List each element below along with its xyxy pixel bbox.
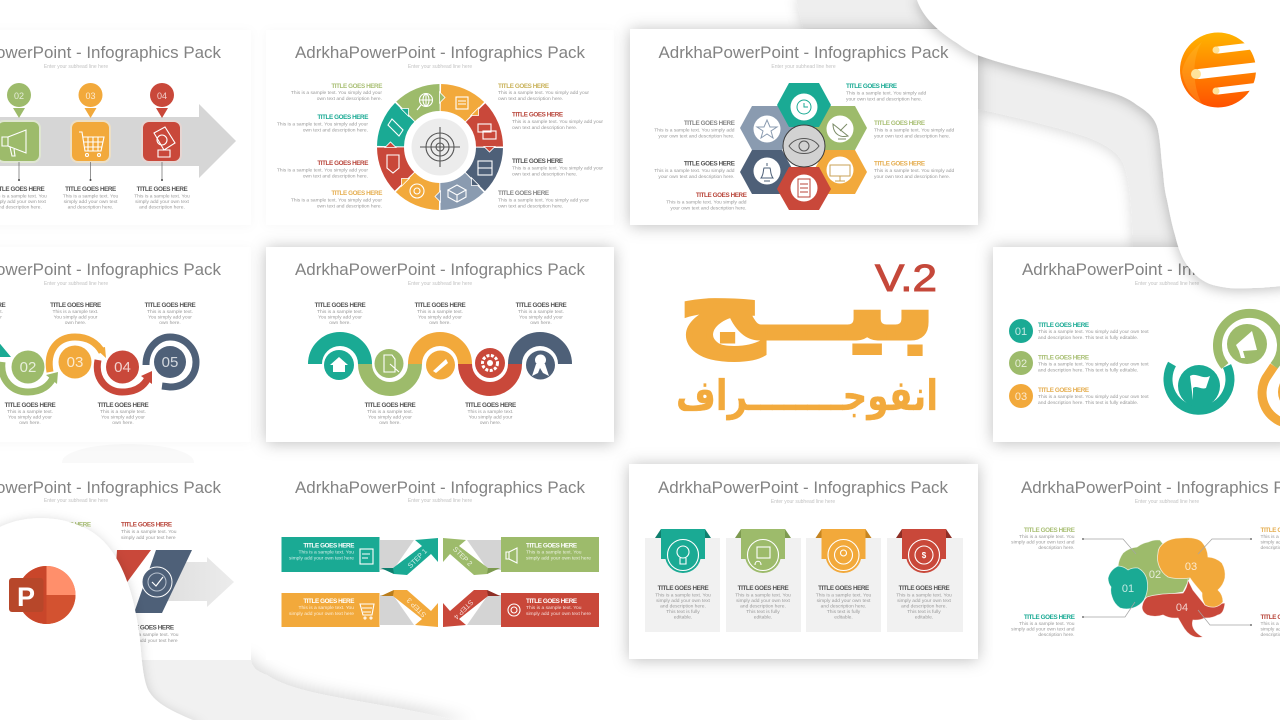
panel: center logo xyxy=(630,247,978,442)
slide 5 labels: own here. xyxy=(429,320,451,326)
brain labels: simply add your own text and xyxy=(1011,626,1075,632)
hexagon cluster xyxy=(740,83,867,210)
brain labels xyxy=(1011,527,1280,638)
wheel labels right: This is a sample text. You simply add your xyxy=(498,198,589,204)
hexagon labels left: TITLE GOES HERE xyxy=(684,160,735,168)
step 04: and description here. xyxy=(139,204,185,210)
panel: slide 9 cards xyxy=(629,464,978,659)
panel: slide 1 arrow timeline xyxy=(0,30,251,225)
slide 5 labels: TITLE GOES HERE xyxy=(315,302,366,309)
card 3: editable. xyxy=(834,614,853,620)
slide 4 labels: This is a sample text. xyxy=(100,409,146,415)
top-right white swoosh xyxy=(917,0,1280,289)
slide 4 labels: You simply add your xyxy=(54,314,98,320)
steps row one: TITLE GOES HERE xyxy=(303,542,354,550)
brain labels: description here. xyxy=(1038,632,1074,638)
slide 7 labels xyxy=(40,522,179,644)
slide 4 labels: You simply add your xyxy=(148,314,192,320)
brain chart xyxy=(1108,538,1225,638)
card 3: This text is fully xyxy=(827,609,861,615)
step 02 xyxy=(0,83,47,210)
slide 4 labels: This is a sample text. xyxy=(53,309,98,315)
card 3: and description here. xyxy=(821,604,866,610)
steps row two: simply add your own text here xyxy=(289,611,354,617)
card 3: This is a sample text. You xyxy=(816,592,872,598)
step 04: 04 xyxy=(157,91,167,101)
steps row two: This is a sample text. You xyxy=(299,605,354,611)
brain labels: TITLE GOES HERE xyxy=(1024,614,1075,621)
hexagon labels left: This is a sample text. You simply add xyxy=(654,128,735,134)
slide 5 labels xyxy=(315,302,567,426)
hexagon labels left: This is a sample text. You simply add xyxy=(654,168,735,174)
steps row one: simply add your own text here xyxy=(526,556,591,562)
steps row two: TITLE GOES HERE xyxy=(303,598,354,605)
numbered list: TITLE GOES HERE xyxy=(1038,387,1089,394)
slide 5 labels: TITLE GOES HERE xyxy=(516,302,567,309)
panel: slide 6 linked rings xyxy=(993,247,1280,442)
slide 7 labels: TITLE GOES HERE xyxy=(121,522,172,528)
card 4: TITLE GOES HERE xyxy=(899,585,950,592)
hexagon labels left: your own text and description here. xyxy=(658,174,734,180)
arrows and numbers: 04 xyxy=(114,359,131,376)
Arabic title: بيــج xyxy=(679,256,935,359)
step 03: TITLE GOES HERE xyxy=(65,186,116,193)
ring diagram xyxy=(1168,313,1280,424)
brain labels: This is a sample text. You xyxy=(1019,534,1075,540)
brain numbers xyxy=(1122,561,1197,614)
brain labels: TITLE GOES HERE xyxy=(1024,527,1075,534)
step 04 xyxy=(134,83,190,210)
slide 5 labels: You simply add your xyxy=(519,314,563,320)
brain labels: simply add your own text and xyxy=(1011,540,1075,546)
slide 4 labels: This is a sample text. xyxy=(147,309,193,315)
panel: slide 8 steps xyxy=(266,463,614,660)
wheel labels left: own text and description here. xyxy=(317,96,382,102)
slide 1 subhead: Enter your subhead line here xyxy=(44,64,108,70)
wheel labels right: TITLE GOES HERE xyxy=(512,112,563,118)
hexagon labels left: TITLE GOES HERE xyxy=(696,192,747,199)
step 03: This is a sample text. You xyxy=(63,194,119,200)
slide 7 labels: simply add your text here xyxy=(123,638,178,644)
slide 2 subhead: Enter your subhead line here xyxy=(408,64,472,70)
step 04: TITLE GOES HERE xyxy=(137,186,188,193)
slide 5 subhead: Enter your subhead line here xyxy=(408,281,472,287)
card 1: editable. xyxy=(674,614,692,620)
card 2: editable. xyxy=(754,614,772,620)
wheel labels left: This is a sample text. You simply add your xyxy=(277,168,368,174)
Arabic subtitle: انفوجــــــــراف xyxy=(676,371,938,421)
gray arrow xyxy=(0,104,236,178)
slide 5 labels: You simply add your xyxy=(368,414,412,420)
wheel labels left: own text and description here. xyxy=(317,204,382,210)
brain labels: This is a sample text. You xyxy=(1019,621,1075,627)
numbered list: 02 xyxy=(1015,358,1027,370)
hexagon labels right: your own text and description here. xyxy=(874,134,950,140)
step 03 xyxy=(63,83,119,210)
card 2 xyxy=(726,529,801,632)
slide 4 labels: TITLE GOES HERE xyxy=(50,302,101,309)
wheel labels left: TITLE GOES HERE xyxy=(317,160,368,167)
wheel labels right: TITLE GOES HERE xyxy=(498,83,549,90)
step 04: This is a sample text. You xyxy=(134,194,190,200)
steps row two: STEP 4 xyxy=(452,598,474,620)
brain leader lines xyxy=(1082,538,1252,626)
slide 5 labels: This is a sample text. xyxy=(518,309,564,315)
arrows and numbers: 02 xyxy=(20,359,36,376)
hexagon labels left: your own text and description here. xyxy=(670,206,746,212)
slide 5 labels: TITLE GOES HERE xyxy=(365,402,416,409)
slide 5 labels: own here. xyxy=(480,420,501,426)
hexagon labels right: This is a sample text. You simply add xyxy=(846,90,926,96)
card 1: This text is fully xyxy=(666,609,700,615)
slide 4 labels: You simply add your xyxy=(101,414,145,420)
wheel labels left: own text and description here. xyxy=(303,174,368,180)
wheel labels left: This is a sample text. You simply add your xyxy=(277,122,368,128)
steps row one: TITLE GOES HERE xyxy=(526,542,577,550)
card 4: simply add your own text xyxy=(897,598,952,604)
brain numbers: 01 xyxy=(1122,583,1134,595)
panel: slide 2 segmented wheel xyxy=(266,30,614,225)
bottom-left white lobe xyxy=(0,518,205,720)
card 2: and description here. xyxy=(740,604,786,610)
slide 5 labels: This is a sample text. xyxy=(367,409,413,415)
wheel labels right: own text and description here. xyxy=(498,204,563,210)
numbered list: TITLE GOES HERE xyxy=(1038,322,1089,329)
arrows and numbers xyxy=(0,337,196,392)
brain numbers: 04 xyxy=(1176,602,1188,614)
wheel chart xyxy=(370,77,510,217)
slide 7 labels: TITLE GOES HERE xyxy=(40,522,91,528)
panel: slide 3 hexagons xyxy=(630,29,978,225)
slide 7 labels: simply add your text here xyxy=(121,535,176,541)
slide 3 heading: AdrkhaPowerPoint - Infographics Pack xyxy=(658,43,949,62)
wheel labels right: TITLE GOES HERE xyxy=(498,190,549,197)
slide 4 labels: own here. xyxy=(65,320,86,326)
wheel labels right xyxy=(498,83,603,210)
wheel labels left: This is a sample text. You simply add your xyxy=(291,198,382,204)
arrows and numbers: 03 xyxy=(67,354,83,371)
slide 2 heading: AdrkhaPowerPoint - Infographics Pack xyxy=(295,43,585,62)
card 4: This text is fully xyxy=(907,609,941,615)
slide 5 labels: TITLE GOES HERE xyxy=(415,302,466,309)
slide 4 subhead: Enter your subhead line here xyxy=(44,281,108,287)
steps row two: This is a sample text. You xyxy=(526,605,582,611)
hexagon labels left: your own text and description here. xyxy=(658,134,734,140)
panel: slide 7 diagonal ribbons xyxy=(0,463,251,660)
wave graphic xyxy=(315,339,565,389)
steps row one: This is a sample text. You xyxy=(526,550,582,556)
wheel labels left: This is a sample text. You simply add your xyxy=(291,90,382,96)
card 1: This is a sample text. You xyxy=(655,592,711,598)
slide 8 subhead: Enter your subhead line here xyxy=(408,498,472,504)
hexagon labels right: This is a sample text. You simply add xyxy=(874,168,954,174)
wheel labels right: This is a sample text. You simply add your xyxy=(498,90,589,96)
wheel labels right: TITLE GOES HERE xyxy=(512,158,563,165)
slide 7 subhead: Enter your subhead line here xyxy=(44,498,108,504)
step 03: 03 xyxy=(85,91,96,101)
wheel labels right: own text and description here. xyxy=(512,172,577,178)
ribbon arrow xyxy=(115,550,234,613)
card 2: This is a sample text. You xyxy=(735,592,791,598)
slide 4 labels: own here. xyxy=(159,320,181,326)
steps row one: simply add your own text here xyxy=(289,556,354,562)
wave icons xyxy=(324,348,555,380)
card 4: $ xyxy=(922,551,927,560)
steps row two: STEP 3 xyxy=(406,596,428,618)
hexagon labels right: TITLE GOES HERE xyxy=(846,83,897,90)
hexagon labels right: your own text and description here. xyxy=(846,96,922,102)
card 3: simply add your own text xyxy=(817,598,871,604)
arrows and numbers: 05 xyxy=(162,354,178,371)
slide 4 labels: own here. xyxy=(112,420,134,426)
slide 4 labels: own here. xyxy=(19,420,41,426)
wheel labels left: TITLE GOES HERE xyxy=(331,83,382,90)
step 03: simply add your own text xyxy=(64,199,118,205)
numbered list: and description here. This text is fully editable. xyxy=(1038,400,1138,406)
hexagon labels left xyxy=(654,120,747,212)
numbered list: and description here. This text is fully editable. xyxy=(1038,368,1138,374)
slide 4 labels: TITLE GOES HERE xyxy=(145,302,196,309)
slide 5 labels: This is a sample text. xyxy=(468,409,513,415)
hexagon labels right: TITLE GOES HERE xyxy=(874,120,925,127)
slide 8 heading: AdrkhaPowerPoint - Infographics Pack xyxy=(295,478,585,497)
steps row two: TITLE GOES HERE xyxy=(526,598,577,605)
slide 7 labels: TITLE GOES HERE xyxy=(123,624,174,632)
brain numbers: 03 xyxy=(1185,561,1197,573)
slide 5 labels: You simply add your xyxy=(418,314,462,320)
icon: PowerPoint logo xyxy=(9,566,76,624)
wheel labels left: TITLE GOES HERE xyxy=(317,114,368,121)
wheel labels right: own text and description here. xyxy=(498,96,563,102)
numbered list: This is a sample text. You simply add your own text xyxy=(1038,362,1149,368)
wheel labels left: TITLE GOES HERE xyxy=(331,190,382,197)
wheel labels left xyxy=(277,83,382,210)
numbered list: TITLE GOES HERE xyxy=(1038,354,1089,362)
hexagon labels left: This is a sample text. You simply add xyxy=(666,200,747,206)
numbered list: This is a sample text. You simply add your own text xyxy=(1038,329,1149,335)
slide 5 labels: This is a sample text. xyxy=(317,309,363,315)
card 1 xyxy=(645,529,720,632)
slide 3 subhead: Enter your subhead line here xyxy=(771,64,836,70)
slide 5 labels: own here. xyxy=(530,320,552,326)
slide 4 labels xyxy=(0,302,196,426)
steps row one xyxy=(282,537,599,575)
slide 7 labels: This is a sample text. You xyxy=(121,529,177,535)
numbered list: 03 xyxy=(1015,391,1027,403)
slide 7 labels: This is a sample text. You xyxy=(123,632,179,638)
card 4: and description here. xyxy=(901,604,947,610)
panel: slide 4 circular arrows xyxy=(0,247,251,442)
card 2: This text is fully xyxy=(746,609,780,615)
card 2: TITLE GOES HERE xyxy=(738,585,789,592)
wheel labels right: This is a sample text. You simply add your xyxy=(512,166,603,172)
slide 5 labels: TITLE GOES HERE xyxy=(465,402,516,409)
wheel labels left: own text and description here. xyxy=(303,128,368,134)
slide 5 labels: own here. xyxy=(329,320,351,326)
slide 5 labels: This is a sample text. xyxy=(417,309,463,315)
numbered list: This is a sample text. You simply add your own text xyxy=(1038,394,1149,400)
card 4 xyxy=(887,529,963,632)
step 04: simply add your own text xyxy=(135,199,190,205)
slide 4 labels: This is a sample text. xyxy=(7,409,53,415)
card 3 xyxy=(806,529,881,632)
slide 4 labels: TITLE GOES HERE xyxy=(5,402,56,409)
steps row two: simply add your own text here xyxy=(526,611,591,617)
wheel labels right: This is a sample text. You simply add your xyxy=(512,119,603,125)
numbered list xyxy=(1009,319,1149,408)
icon: PowerPoint logo: P xyxy=(17,582,35,612)
slide 5 labels: You simply add your xyxy=(469,414,513,420)
card 2: simply add your own text xyxy=(736,598,791,604)
card 4: This is a sample text. You xyxy=(896,592,952,598)
brain numbers: 02 xyxy=(1149,569,1161,581)
slide 5 labels: You simply add your xyxy=(318,314,362,320)
card 3: TITLE GOES HERE xyxy=(818,585,869,592)
slide 9 heading: AdrkhaPowerPoint - Infographics Pack xyxy=(658,478,948,497)
hexagon labels right: your own text and description here. xyxy=(874,174,950,180)
steps row one: STEP 2 xyxy=(451,546,473,568)
slide 4 labels: You simply add your xyxy=(8,414,52,420)
steps row two xyxy=(282,590,599,627)
hexagon labels right: This is a sample text. You simply add xyxy=(874,128,954,134)
hexagon labels right: TITLE GOES HERE xyxy=(874,160,925,168)
card 4: editable. xyxy=(915,614,933,620)
slide 6 subhead: Enter your subhead line here xyxy=(1135,281,1199,287)
card 1: simply add your own text xyxy=(656,598,711,604)
wheel labels right: own text and description here. xyxy=(512,125,577,131)
slide 9 subhead: Enter your subhead line here xyxy=(771,499,835,505)
steps row one: STEP 1 xyxy=(407,548,429,570)
version label: V.2 xyxy=(875,258,937,300)
step 02: 02 xyxy=(14,91,24,101)
steps row one: This is a sample text. You xyxy=(299,550,354,556)
numbered list: and description here. This text is fully editable. xyxy=(1038,335,1138,341)
panel: slide 5 wave xyxy=(266,247,614,442)
step 03: and description here. xyxy=(68,204,113,210)
panel: slide 10 brain xyxy=(993,463,1280,660)
card 1: and description here. xyxy=(660,604,706,610)
slide 10 subhead: Enter your subhead line here xyxy=(1135,499,1199,505)
slide 5 heading: AdrkhaPowerPoint - Infographics Pack xyxy=(295,260,585,279)
slide 4 labels: TITLE GOES HERE xyxy=(98,402,149,409)
card 1: TITLE GOES HERE xyxy=(658,585,709,592)
brain labels: description here. xyxy=(1038,545,1074,551)
slide 5 labels: own here. xyxy=(379,420,401,426)
hexagon labels right xyxy=(846,83,954,180)
numbered list: 01 xyxy=(1015,326,1027,338)
icon: brand logo xyxy=(1180,32,1268,108)
hexagon labels left: TITLE GOES HERE xyxy=(684,120,735,127)
